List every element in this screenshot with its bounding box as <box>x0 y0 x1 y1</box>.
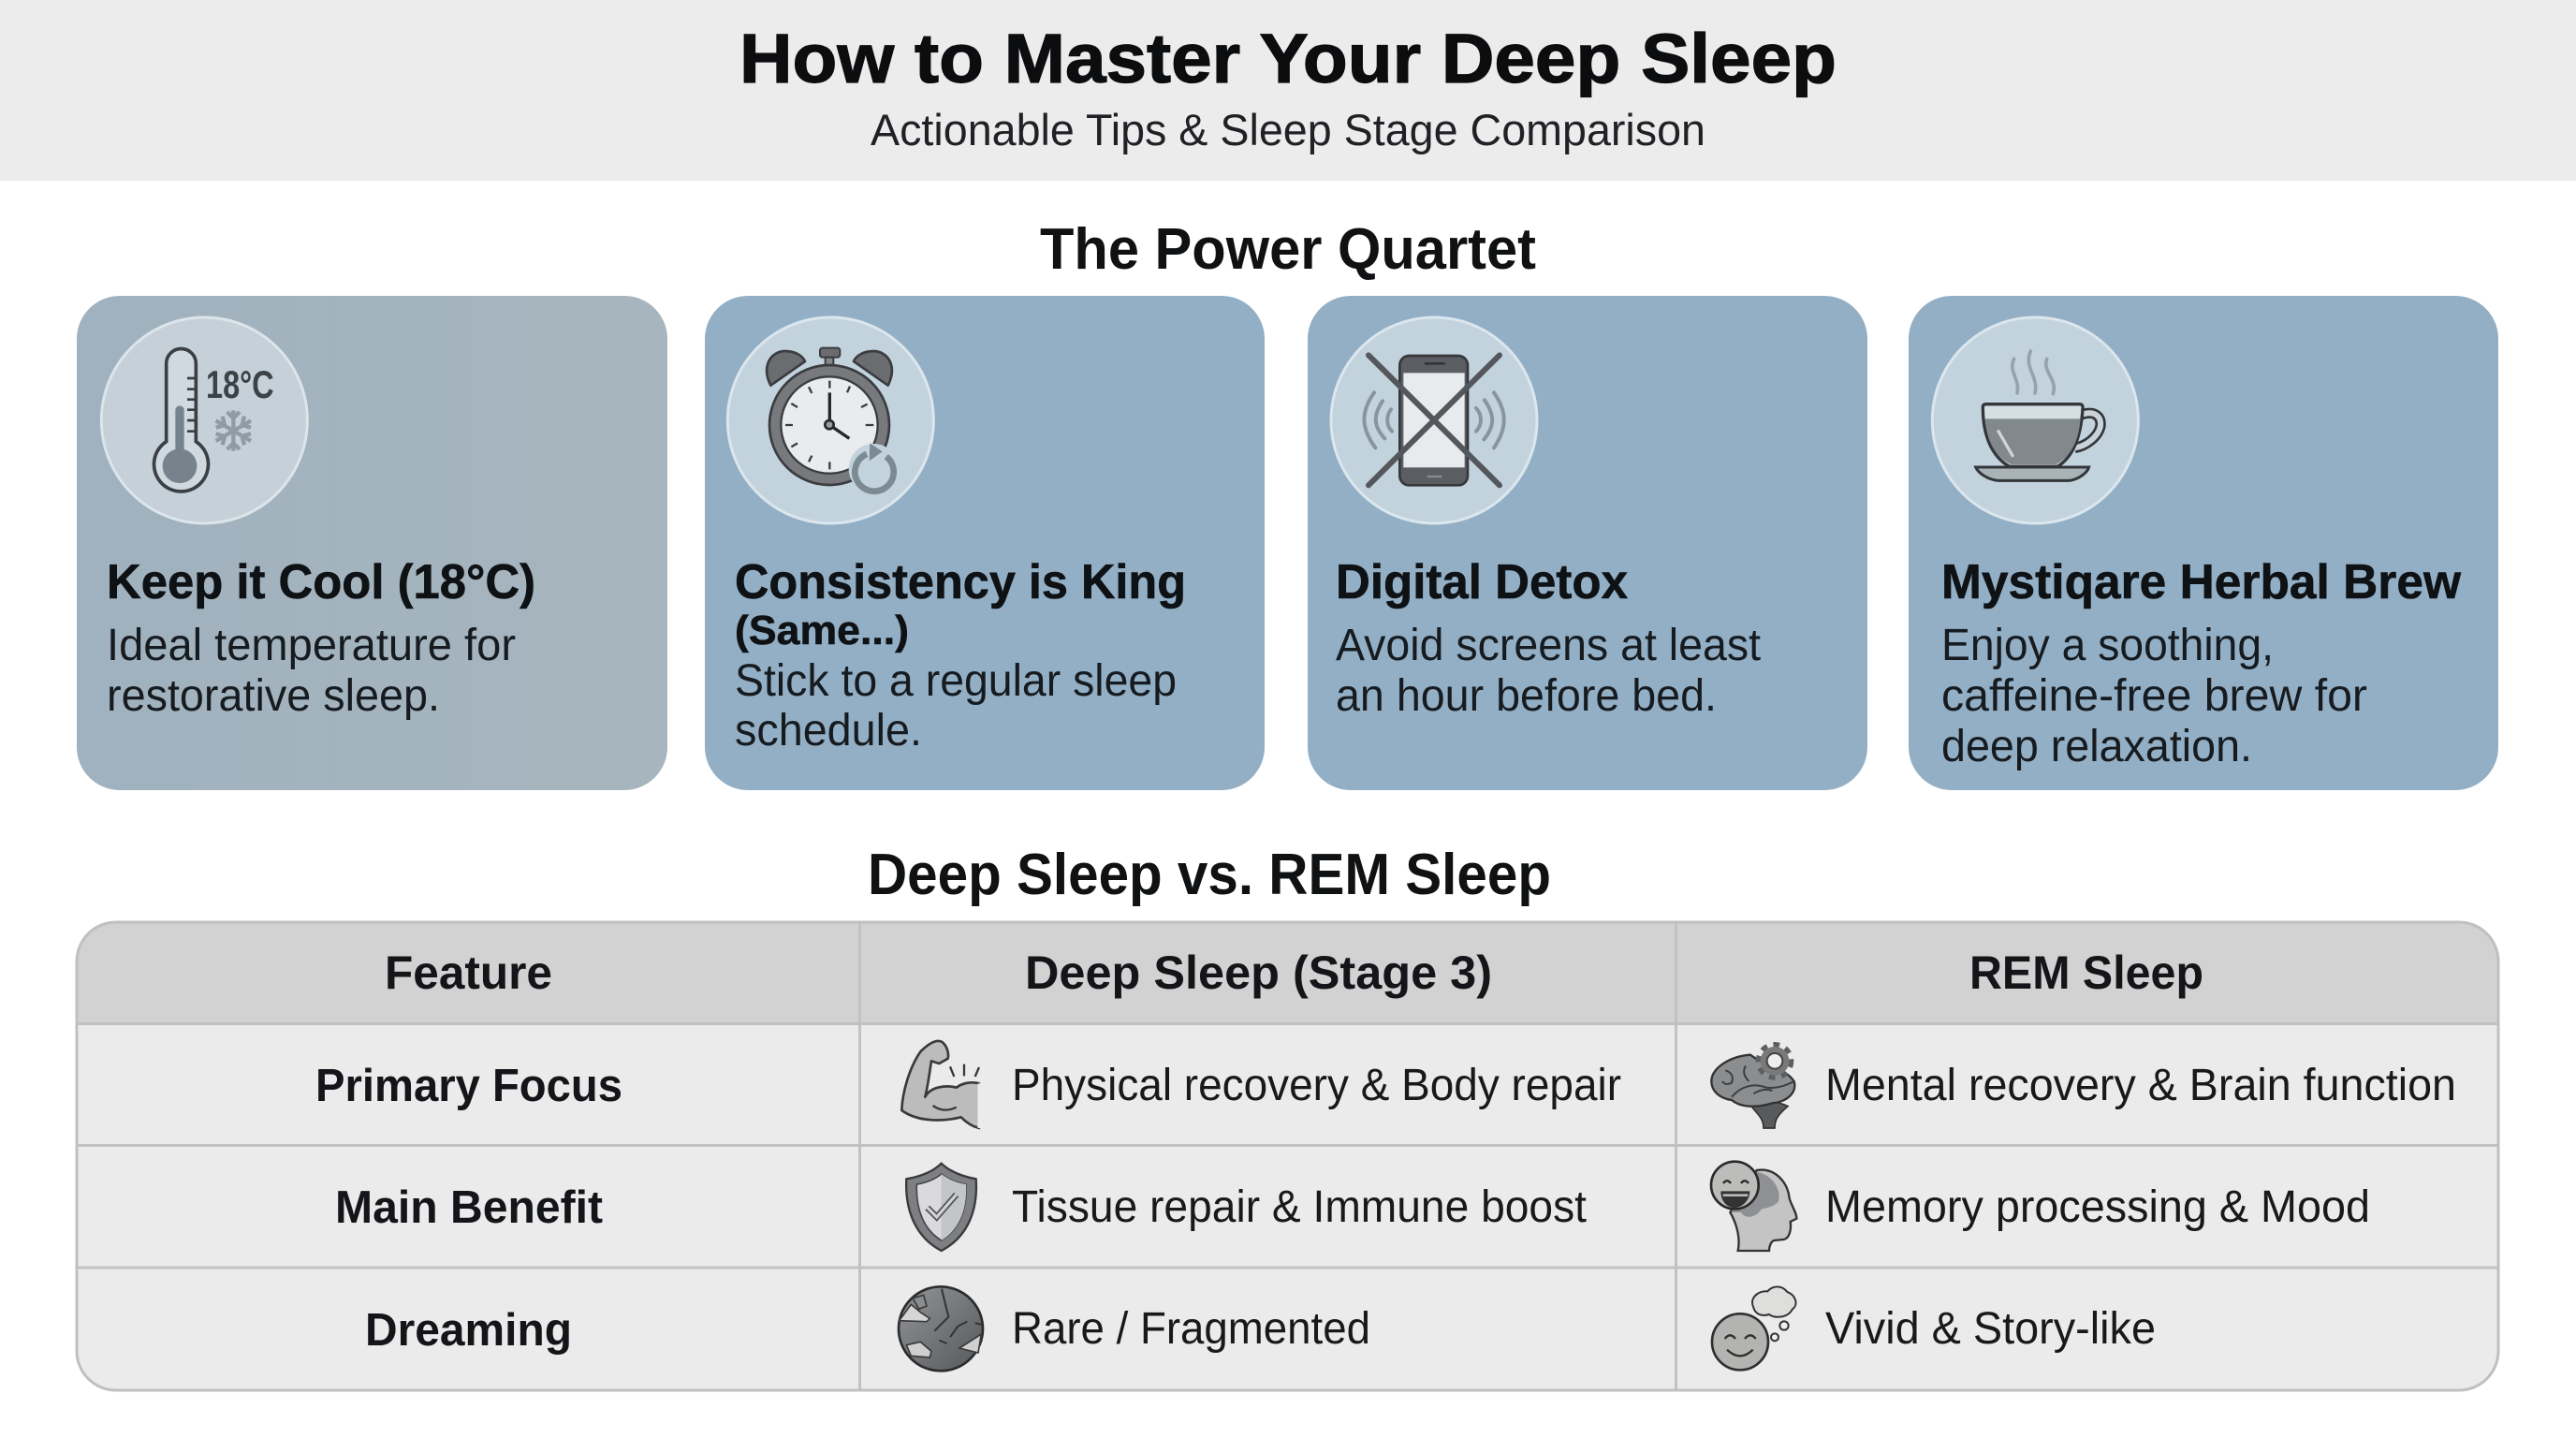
panel: Consistency is King <box>705 296 1265 790</box>
card title: Mystiqare Herbal Brew <box>1941 555 2462 609</box>
row: Primary Focus: Mental recovery & Brain function <box>1825 1061 2456 1110</box>
icon: alarm clock <box>727 317 933 523</box>
row: Main Benefit <box>335 1162 2370 1251</box>
card text: Ideal temperature for <box>107 621 516 670</box>
row: Primary Focus: Primary Focus <box>315 1061 622 1111</box>
card title: Keep it Cool (18°C) <box>107 555 535 609</box>
icon: cracked globe <box>899 1286 983 1371</box>
row: Main Benefit: Tissue repair & Immune boost <box>1012 1182 1587 1232</box>
icon: smiling face with thought cloud <box>1712 1286 1796 1370</box>
icon: thermometer <box>101 317 307 523</box>
card text <box>735 656 1177 756</box>
row: Main Benefit: Memory processing & Mood <box>1825 1182 2370 1232</box>
heading: The Power Quartet: The Power Quartet <box>1040 217 1536 282</box>
subtitle: Actionable Tips & Sleep Stage Comparison <box>871 105 1705 154</box>
card text <box>1941 621 2367 771</box>
card text: Enjoy a soothing, <box>1941 621 2274 670</box>
panel: Mystiqare Herbal Brew <box>1909 296 2498 790</box>
card text <box>1336 621 1761 721</box>
title: How to Master Your Deep Sleep <box>739 20 1837 97</box>
icon: thermometer: 18°C <box>206 362 274 406</box>
row: Dreaming: Rare / Fragmented <box>1012 1304 1370 1354</box>
card title: Digital Detox <box>1336 555 1628 609</box>
heading: Deep Sleep vs. REM Sleep: Deep Sleep vs. REM Sleep <box>868 843 1551 907</box>
icon: shield with check <box>906 1164 976 1251</box>
panel: Digital Detox <box>1308 296 1867 790</box>
icon: tea cup <box>1932 317 2138 523</box>
card text: caffeine-free brew for <box>1941 671 2367 721</box>
card text: schedule. <box>735 706 922 756</box>
icon: crossed-out phone <box>1331 317 1537 523</box>
row: Primary Focus: Physical recovery & Body repair <box>1012 1061 1621 1110</box>
card text <box>107 621 516 721</box>
card text: restorative sleep. <box>107 671 440 721</box>
icon: head with smiling face <box>1711 1162 1796 1251</box>
row: Primary Focus <box>315 1041 2456 1128</box>
table header: Feature <box>385 946 552 999</box>
icon: brain with gear <box>1711 1045 1794 1128</box>
comparison table <box>77 922 2498 1390</box>
row: Main Benefit: Main Benefit <box>335 1182 603 1233</box>
table header: REM Sleep <box>1969 946 2203 999</box>
card text: deep relaxation. <box>1941 722 2252 771</box>
icon: flexed arm <box>901 1041 979 1128</box>
header band <box>0 0 2576 181</box>
card title: Consistency is King <box>735 555 1186 609</box>
row: Dreaming: Vivid & Story-like <box>1825 1304 2156 1354</box>
row: Dreaming <box>365 1286 2156 1371</box>
table header: Deep Sleep (Stage 3) <box>1025 946 1492 999</box>
card text: an hour before bed. <box>1336 671 1717 721</box>
table header <box>385 946 2203 999</box>
panel: Keep it Cool <box>77 296 667 790</box>
card text: Stick to a regular sleep <box>735 656 1177 706</box>
card text: Avoid screens at least <box>1336 621 1761 670</box>
card title continuation: (Same...) <box>735 608 909 653</box>
row: Dreaming: Dreaming <box>365 1305 572 1356</box>
